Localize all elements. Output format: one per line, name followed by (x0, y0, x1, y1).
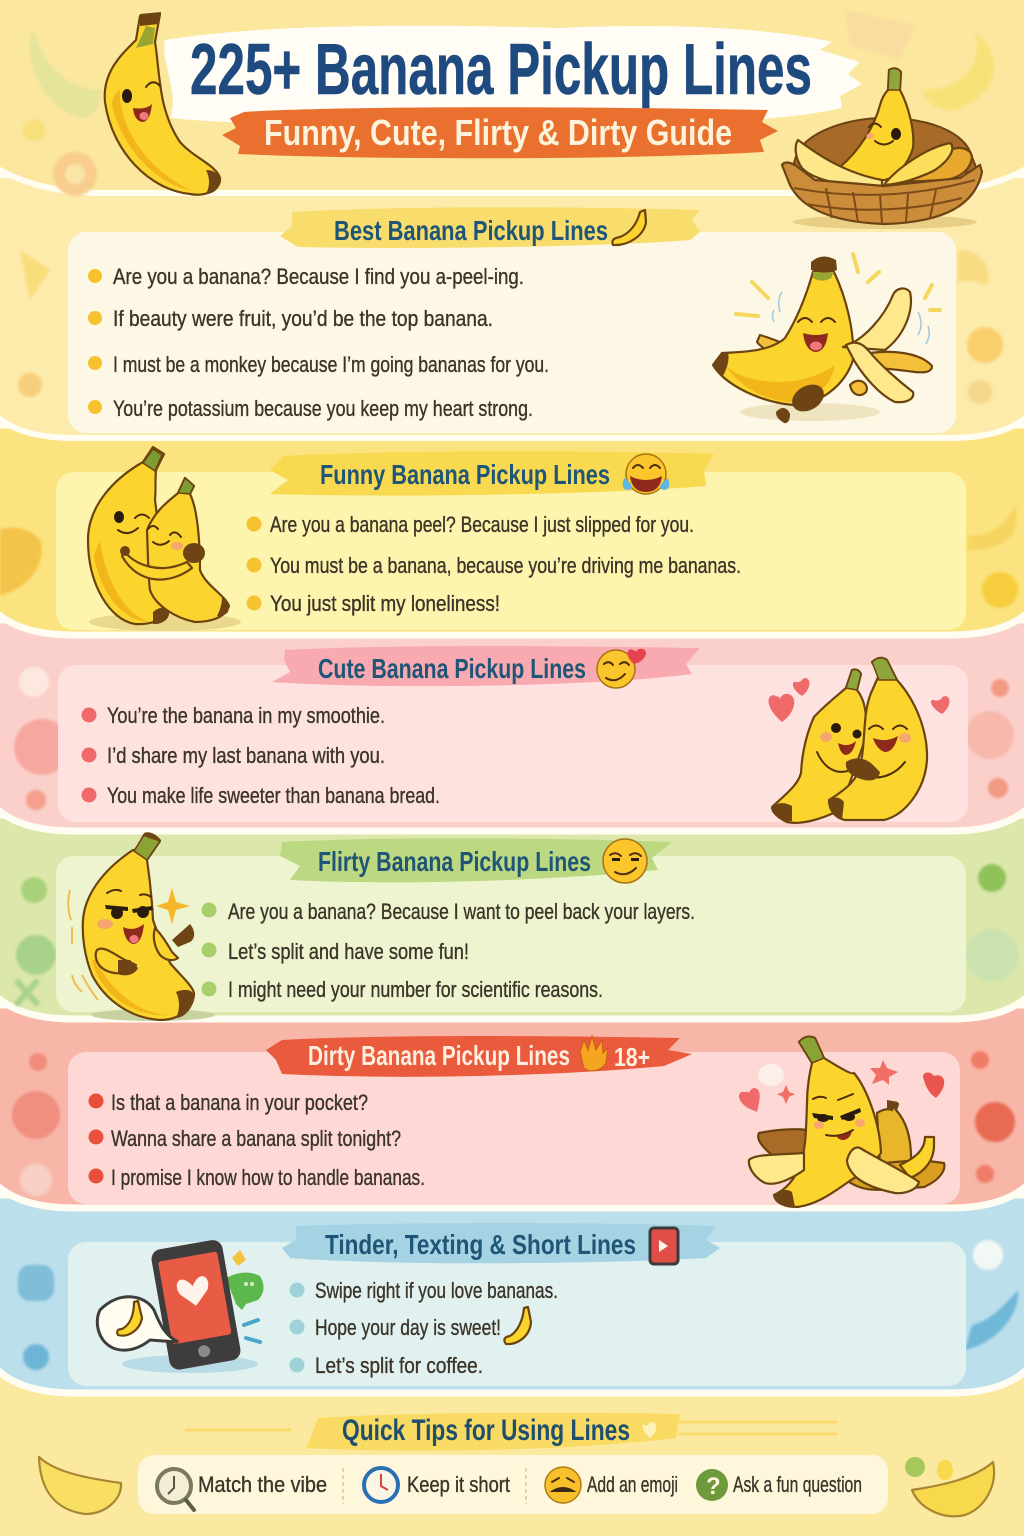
band: header background (0, 0, 1024, 193)
tip: ask a fun question (696, 1469, 862, 1501)
tip: keep it short (364, 1468, 510, 1502)
title backdrop brush (164, 26, 862, 128)
list: best lines: I must be a monkey because I’m going bananas for you. (113, 352, 549, 377)
icon: phone with heart and chat bubbles (97, 1239, 264, 1373)
tip: add an emoji (545, 1467, 678, 1503)
heading ribbon: best (280, 207, 700, 248)
list: best lines: You’re potassium because you keep my heart strong. (113, 396, 533, 421)
heading ribbon: best: Best Banana Pickup Lines (334, 215, 608, 246)
list: cute lines: I’d share my last banana with you. (107, 743, 385, 768)
list: tinder lines: Hope your day is sweet! (315, 1315, 501, 1340)
heading ribbon: funny (270, 451, 714, 496)
list: flirty lines: Are you a banana? Because I want to peel back your layers. (228, 899, 695, 924)
list: best lines: If beauty were fruit, you’d be the top banana. (113, 306, 493, 331)
list: funny lines (246, 512, 741, 616)
icon: winking banana mascot (105, 12, 220, 195)
band: best background (0, 175, 1024, 438)
band: tinder background (0, 1195, 1024, 1393)
heading ribbon: dirty: 18+ (614, 1042, 650, 1072)
band: cute background (0, 620, 1024, 831)
heading ribbon: dirty: Dirty Banana Pickup Lines (308, 1040, 570, 1071)
list: tinder lines (290, 1278, 558, 1378)
list: cute lines: You’re the banana in my smoothie. (107, 703, 385, 728)
heading: quick tips: Quick Tips for Using Lines (342, 1414, 630, 1447)
heading ribbon: cute (272, 646, 700, 688)
band: funny background (0, 425, 1024, 635)
panel: quick tips (138, 1455, 888, 1514)
tip: match the vibe (157, 1469, 327, 1510)
icon: laughing banana with peel (713, 254, 940, 423)
list: flirty lines: I might need your number for scientific reasons. (228, 977, 603, 1002)
tip: ask a fun question: Ask a fun question (733, 1472, 862, 1497)
list: flirty lines (202, 899, 695, 1002)
band: quick tips background (0, 1380, 1024, 1536)
tip: add an emoji: Add an emoji (587, 1472, 678, 1497)
list: tinder lines: Swipe right if you love bananas. (315, 1278, 558, 1303)
heading ribbon: tinder: Tinder, Texting & Short Lines (325, 1229, 636, 1260)
list: dirty lines: Is that a banana in your pocket? (111, 1090, 368, 1115)
heading ribbon: funny: Funny Banana Pickup Lines (320, 459, 610, 490)
panel: cute banana pickup lines (58, 646, 968, 823)
heading ribbon: cute: Cute Banana Pickup Lines (318, 653, 586, 684)
heading ribbon: flirty (280, 838, 672, 883)
list: best lines (88, 264, 549, 421)
list: cute lines: You make life sweeter than banana bread. (107, 783, 440, 808)
icon: banana basket (782, 68, 982, 229)
icon: flirty banana (68, 832, 215, 1021)
heading ribbon: dirty (266, 1036, 692, 1077)
tip: keep it short: Keep it short (407, 1472, 510, 1497)
icon: banana right of tips (905, 1457, 994, 1516)
subtitle: Funny, Cute, Flirty & Dirty Guide (264, 112, 732, 153)
band: dirty background (0, 1005, 1024, 1208)
list: dirty lines: Wanna share a banana split tonight? (111, 1126, 401, 1151)
icon: banana left of tips (39, 1457, 121, 1514)
band: flirty background (0, 815, 1024, 1019)
list: tinder lines: Let’s split for coffee. (315, 1353, 483, 1378)
panel: tinder, texting and short lines (68, 1223, 966, 1386)
panel: best banana pickup lines (68, 207, 956, 433)
list: cute lines (82, 703, 440, 808)
heading ribbon: flirty: Flirty Banana Pickup Lines (318, 846, 591, 877)
icon: cuddling bananas with hearts (768, 658, 949, 823)
list: dirty lines: I promise I know how to handle bananas. (111, 1165, 425, 1190)
list: best lines: Are you a banana? Because I find you a-peel-ing. (113, 264, 524, 289)
list: dirty lines (88, 1090, 425, 1190)
tip: ask a fun question: ? (706, 1473, 721, 1500)
heading: quick tips (186, 1413, 836, 1451)
list: funny lines: You just split my loneliness! (270, 591, 500, 616)
subtitle ribbon (222, 107, 778, 158)
panel: funny banana pickup lines (56, 447, 966, 631)
heading ribbon: tinder (282, 1223, 720, 1264)
list: funny lines: You must be a banana, because you’re driving me bananas. (270, 553, 741, 578)
icon: cheeky peeled banana (739, 1037, 944, 1207)
panel: flirty banana pickup lines (56, 832, 966, 1021)
panel: dirty banana pickup lines (68, 1036, 960, 1207)
icon: hugging bananas (88, 447, 241, 631)
tip: match the vibe: Match the vibe (198, 1472, 327, 1497)
list: funny lines: Are you a banana peel? Because I just slipped for you. (270, 512, 694, 537)
list: flirty lines: Let’s split and have some fun! (228, 939, 469, 964)
